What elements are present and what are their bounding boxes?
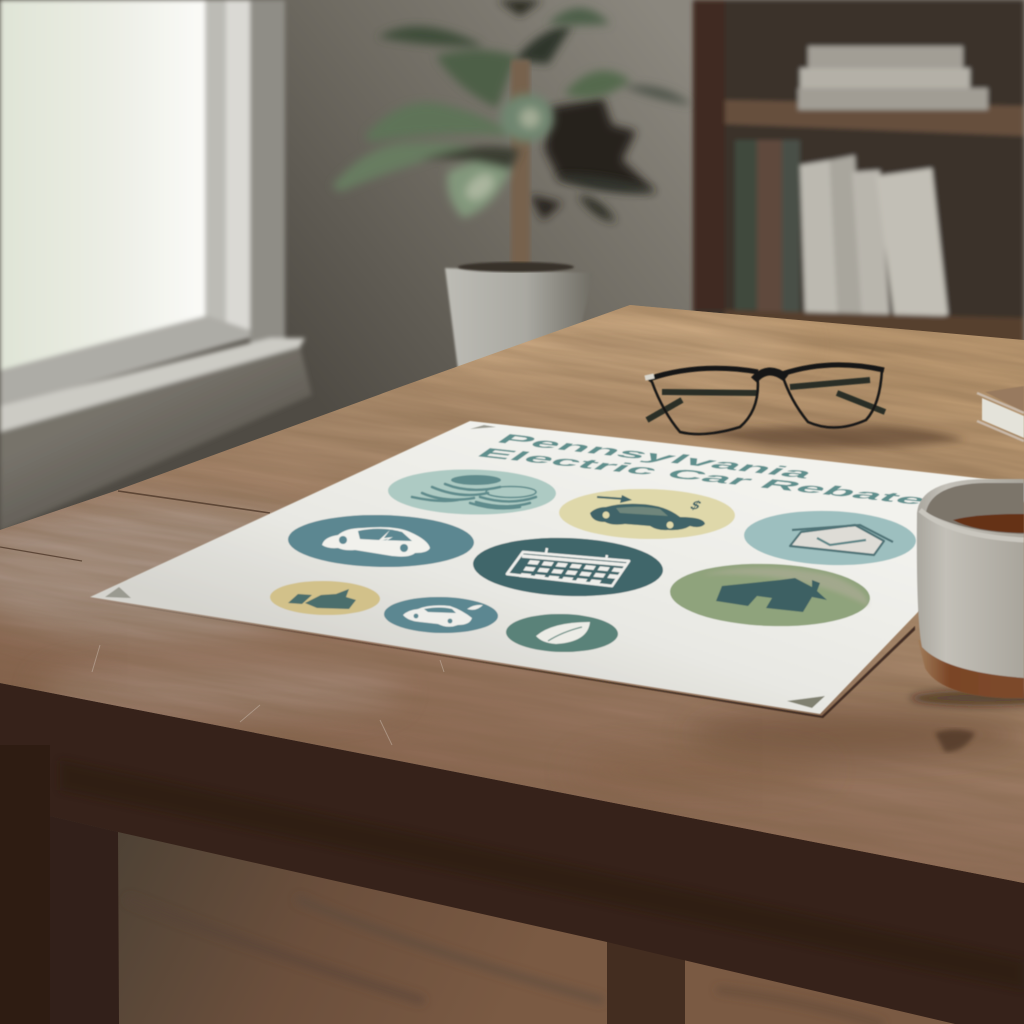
window inner frame	[205, 0, 226, 340]
title	[471, 431, 934, 508]
shelf interior	[693, 0, 1024, 345]
coins icon	[412, 475, 536, 508]
house shade	[700, 568, 868, 606]
upper book stack	[798, 46, 988, 110]
small car circle	[384, 596, 498, 634]
pot soil	[458, 262, 574, 272]
car and dollar circle	[559, 487, 735, 541]
book cover edges	[977, 393, 1024, 441]
cup body	[917, 479, 1024, 678]
plant pot	[445, 268, 593, 370]
upper shelf board	[725, 100, 1024, 136]
lower books	[735, 140, 948, 325]
wood scratches	[92, 645, 444, 745]
electric car icon	[322, 527, 430, 557]
glasses shadow	[695, 426, 965, 448]
shelf post	[693, 0, 725, 310]
table top colour variation	[0, 305, 1024, 818]
left lens	[650, 369, 758, 434]
thumbs up circle	[270, 580, 380, 616]
lower shelf board	[725, 310, 1024, 345]
leaf circle	[506, 613, 618, 653]
plant trunk	[511, 60, 530, 272]
house circle	[669, 561, 871, 629]
cup interior	[926, 483, 1024, 534]
corner marker left	[105, 587, 131, 598]
badge: leaf	[506, 613, 618, 653]
eyeglasses	[645, 365, 885, 434]
bridge	[754, 371, 786, 380]
bookshelf	[693, 0, 1024, 345]
title line 2: Electric Car Rebate	[471, 445, 934, 508]
window outer frame	[250, 0, 285, 345]
apron shadow band	[60, 760, 1024, 990]
table top	[0, 305, 1024, 883]
badge: small car	[384, 596, 498, 634]
right lens	[782, 365, 882, 428]
badge: thumbs up	[270, 580, 380, 616]
badge: coins	[388, 468, 556, 516]
badge: home check	[743, 508, 917, 568]
plank joints	[0, 491, 270, 561]
cup front lip	[920, 510, 1024, 540]
wall under the sill	[0, 347, 312, 532]
table leg right	[607, 930, 685, 1024]
plant leaves behind trunk	[378, 0, 656, 220]
plant leaves in front	[332, 8, 692, 222]
table leg left inner	[50, 816, 119, 1024]
poster sheet	[90, 421, 1024, 714]
cup tea	[953, 514, 1024, 533]
wood knot	[935, 730, 975, 752]
floor streaks	[130, 900, 880, 1024]
calendar icon	[507, 548, 629, 586]
badge: calendar	[472, 535, 664, 599]
coins circle	[388, 468, 556, 516]
coffee cup	[910, 479, 1024, 706]
poster shadow	[92, 599, 915, 718]
end pieces	[645, 376, 654, 378]
book cover	[985, 386, 1024, 412]
house icon	[716, 578, 827, 612]
car and dollar icon	[590, 495, 705, 530]
table	[0, 305, 1024, 1024]
small car icon	[403, 605, 483, 627]
top rim left	[648, 368, 758, 379]
badge: house	[669, 561, 871, 629]
calendar circle	[472, 535, 664, 599]
electric car circle	[288, 513, 474, 569]
cup shadow	[910, 690, 1024, 706]
title line 1: Pennsylvania	[491, 431, 821, 482]
book on table	[977, 386, 1024, 441]
corner marker right	[787, 696, 825, 708]
badge: electric car	[288, 513, 474, 569]
cup base	[918, 640, 1024, 698]
window	[0, 0, 312, 532]
top rim right	[782, 365, 884, 374]
floor	[0, 800, 1024, 1024]
home check circle	[743, 508, 917, 568]
window bottom rail	[0, 315, 250, 408]
poster	[90, 421, 1024, 718]
temple arms	[647, 380, 885, 420]
leaf icon	[536, 622, 590, 644]
table leg left	[0, 745, 50, 1024]
window sill	[0, 338, 305, 432]
book pages	[982, 398, 1024, 438]
thumbs up icon	[288, 589, 356, 609]
window frame highlight	[192, 0, 250, 335]
potted plant	[332, 0, 692, 370]
window glass	[0, 0, 205, 370]
badge: car and dollar	[559, 487, 735, 541]
table apron	[0, 683, 1024, 1024]
corner marker top	[470, 425, 496, 429]
dollar sign: $	[687, 499, 704, 513]
home check icon	[790, 525, 893, 555]
